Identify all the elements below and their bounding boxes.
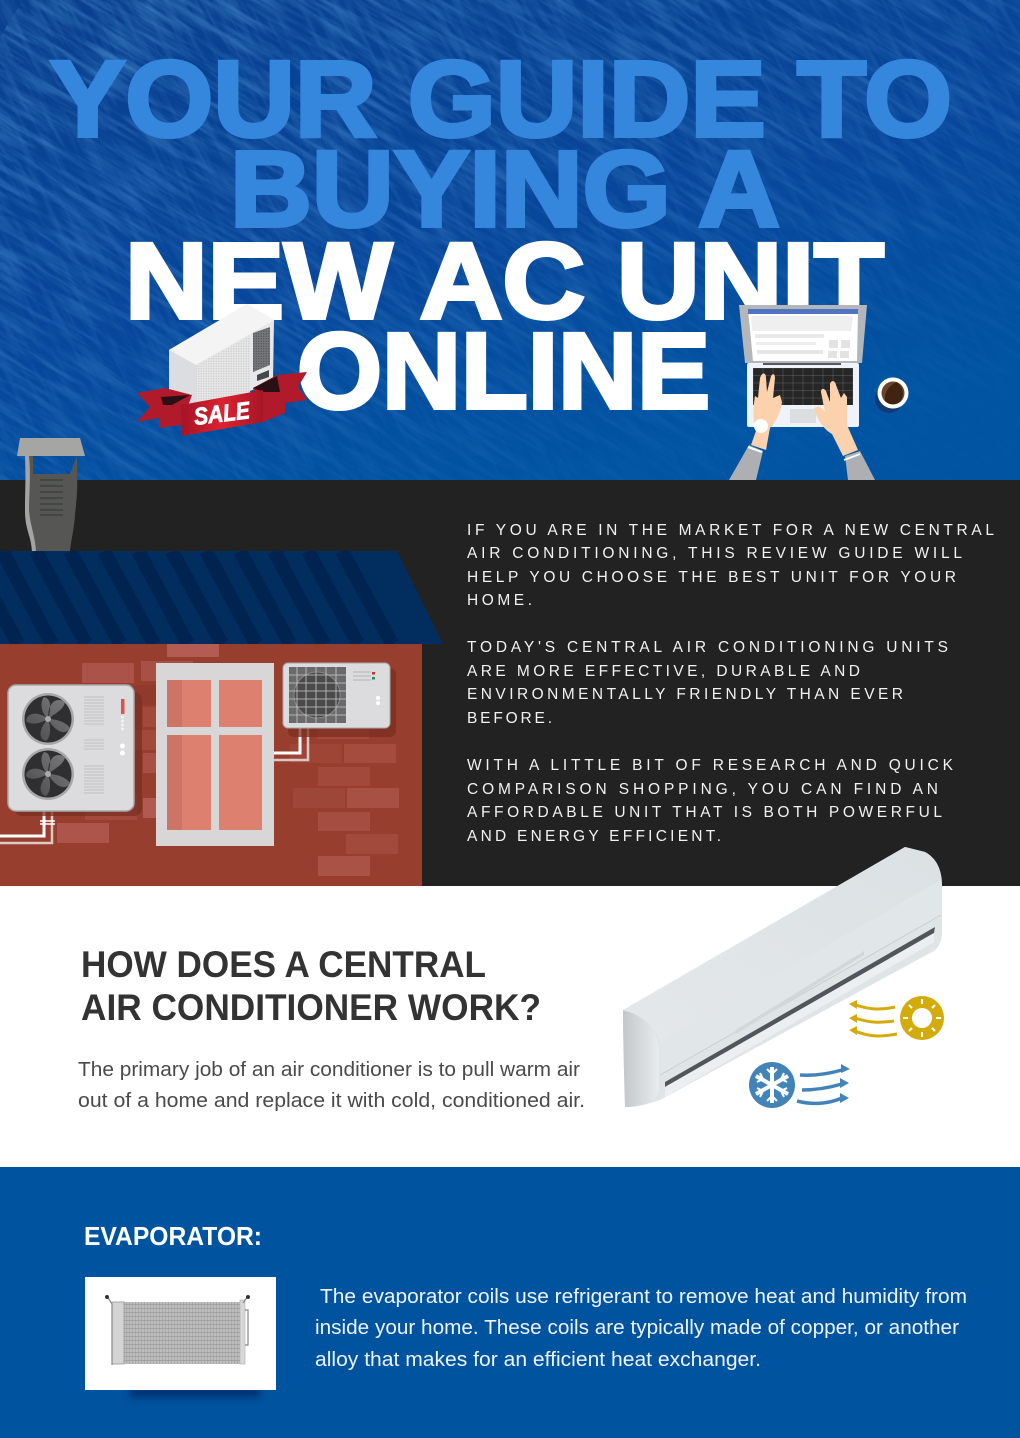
left hand and arm (729, 445, 763, 480)
icon: heat arrows (849, 996, 944, 1040)
paragraph: how it works: The primary job of an air conditioner is to pull warm air (78, 1059, 580, 1081)
heading: how does it work: AIR CONDITIONER WORK? (81, 987, 541, 1028)
laptop base (747, 363, 859, 427)
intro text: HOME. (467, 592, 532, 609)
intro text: BEFORE. (467, 710, 552, 727)
icon: cold arrows (749, 1062, 850, 1108)
photo: evaporator coil (85, 1277, 276, 1397)
bricks (57, 644, 399, 876)
roof (0, 551, 450, 644)
intro text: IF YOU ARE IN THE MARKET FOR A NEW CENTRAL (467, 522, 994, 539)
intro text: TODAY'S CENTRAL AIR CONDITIONING UNITS (467, 639, 948, 656)
pipes from small unit (274, 727, 308, 760)
title: NEW AC UNIT (125, 220, 884, 341)
intro text: AIR CONDITIONING, THIS REVIEW GUIDE WILL (467, 545, 962, 562)
icon: AC unit with sale ribbon (137, 304, 307, 436)
title (50, 38, 952, 431)
dark intro band (0, 480, 1020, 886)
heading: how does it work: HOW DOES A CENTRAL (81, 944, 486, 985)
intro text (467, 522, 994, 845)
fans (22, 693, 74, 800)
intro text: AND ENERGY EFFICIENT. (467, 828, 721, 845)
hero background (0, 0, 1020, 480)
intro text: COMPARISON SHOPPING, YOU CAN FIND AN (467, 781, 938, 798)
paragraph: evaporator: The evaporator coils use refrigerant to remove heat and humidity from (320, 1286, 967, 1308)
chimney (17, 438, 85, 551)
panel: evaporator (0, 1167, 1020, 1438)
pipes from large unit (0, 810, 55, 843)
paragraph: how it works: out of a home and replace it with cold, conditioned air. (78, 1090, 585, 1112)
intro text: ENVIRONMENTALLY FRIENDLY THAN EVER (467, 686, 903, 703)
heading: how does it work (81, 944, 541, 1028)
paragraph: evaporator: alloy that makes for an efficient heat exchanger. (315, 1349, 761, 1371)
intro text: AFFORDABLE UNIT THAT IS BOTH POWERFUL (467, 804, 942, 821)
window (156, 663, 274, 846)
icon: laptop with hands (729, 305, 875, 480)
paragraph: evaporator: inside your home. These coils are typically made of copper, or another (315, 1317, 959, 1339)
small AC unit (283, 663, 396, 737)
title: YOUR GUIDE TO (50, 38, 952, 159)
house illustration (0, 438, 450, 886)
icon: wall mounted AC (623, 847, 942, 1107)
icon: coffee cup (875, 378, 908, 413)
title: ONLINE (297, 310, 710, 431)
intro text: WITH A LITTLE BIT OF RESEARCH AND QUICK (467, 757, 954, 774)
paragraph: evaporator (315, 1286, 967, 1371)
laptop lid (739, 305, 867, 363)
heading: evaporator: EVAPORATOR: (84, 1221, 262, 1251)
intro text: ARE MORE EFFECTIVE, DURABLE AND (467, 663, 860, 680)
ribbon (137, 372, 307, 436)
large AC unit (8, 685, 142, 816)
ribbon: SALE (192, 397, 252, 431)
title: BUYING A (230, 128, 780, 249)
intro text: HELP YOU CHOOSE THE BEST UNIT FOR YOUR (467, 569, 956, 586)
right hand and arm (845, 451, 875, 480)
paragraph: how it works (78, 1059, 585, 1112)
brick wall (0, 644, 422, 886)
